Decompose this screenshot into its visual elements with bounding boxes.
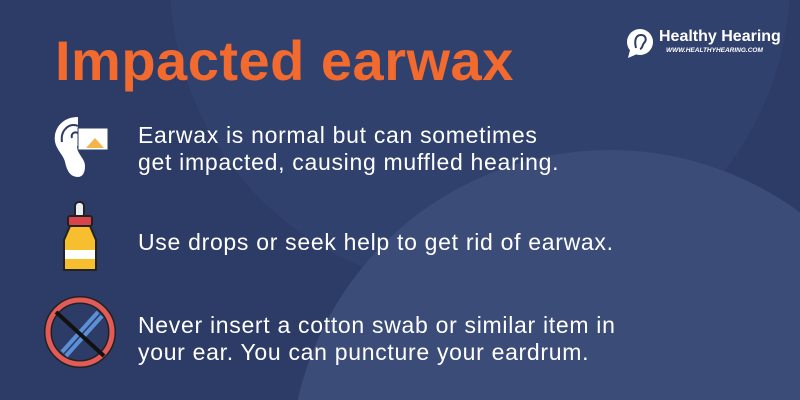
text 1: Earwax is normal but can sometimes [138, 122, 538, 148]
icon: ear [54, 117, 108, 177]
text 3 [138, 312, 616, 365]
text 3: your ear. You can puncture your eardrum. [138, 339, 589, 365]
icon: no cotton swab [44, 296, 116, 368]
icon: bottle [63, 201, 97, 271]
text 2: Use drops or seek help to get rid of earwax. [138, 229, 614, 255]
text 3: Never insert a cotton swab or similar item in [138, 312, 616, 338]
logo: WWW.HEALTHYHEARING.COM [666, 47, 763, 54]
logo [627, 28, 781, 58]
title: Impacted earwax [55, 29, 514, 92]
text 1: get impacted, causing muffled hearing. [138, 149, 559, 175]
text 1 [138, 122, 559, 175]
logo: Healthy Hearing [659, 28, 781, 45]
